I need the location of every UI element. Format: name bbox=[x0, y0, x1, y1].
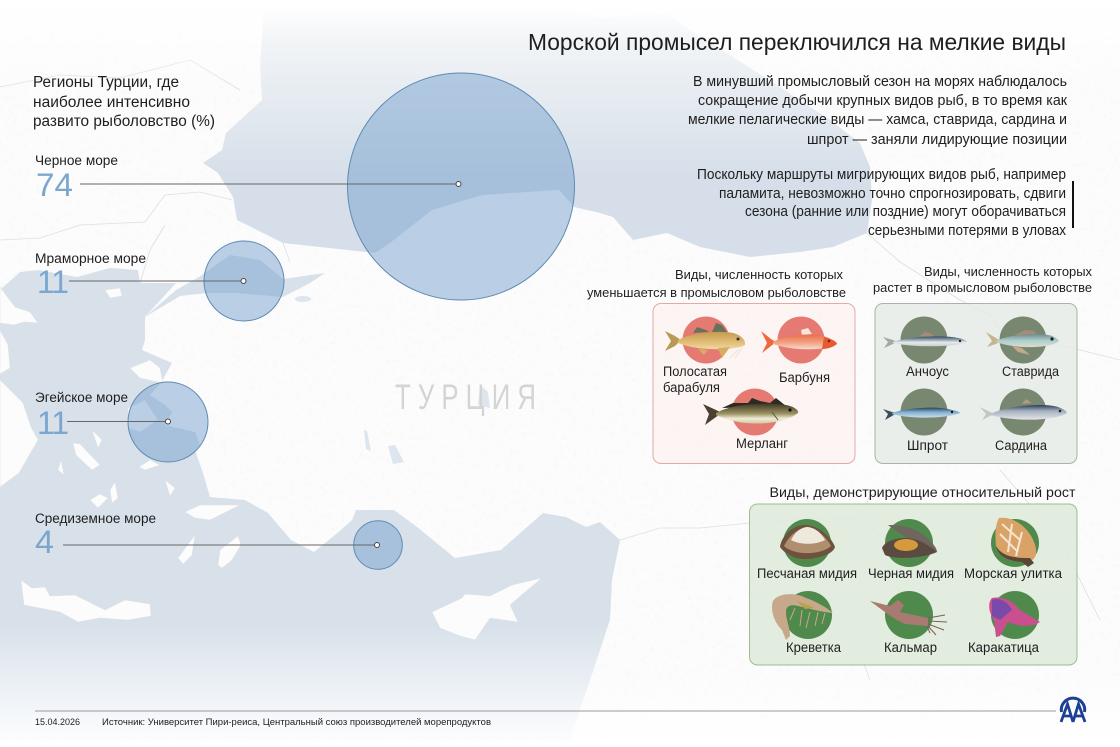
caption: Каракатица bbox=[968, 640, 1039, 655]
label: Mediterranean Sea: Средиземное море bbox=[35, 511, 156, 526]
heading: growing species bbox=[873, 264, 1092, 295]
species: whiting bbox=[703, 388, 798, 451]
caption: Черная мидия bbox=[868, 566, 954, 581]
intro paragraph: мелкие пелагические виды — хамса, ставрида, сардина и bbox=[688, 112, 1067, 128]
heading: declining species: Виды, численность которых bbox=[675, 267, 843, 282]
Black Sea bbox=[203, 0, 872, 257]
caption bbox=[663, 364, 727, 395]
species: horse mackerel bbox=[986, 316, 1059, 379]
heading: growing species: растет в промысловом рыболовстве bbox=[873, 280, 1092, 295]
regions heading bbox=[33, 74, 215, 130]
label: Aegean Sea: Эгейское море bbox=[35, 390, 128, 405]
intro paragraph: сокращение добычи крупных видов рыб, в то время как bbox=[698, 93, 1068, 109]
species: striped red mullet bbox=[663, 316, 745, 395]
icon: Anadolu Agency logo bbox=[1061, 698, 1085, 722]
islands and Greek mainland bbox=[0, 287, 542, 640]
caption: Креветка bbox=[786, 640, 841, 655]
title: Морской промысел переключился на мелкие виды bbox=[528, 29, 1066, 55]
label: Black Sea: Черное море bbox=[35, 153, 118, 168]
species: sprat bbox=[883, 388, 960, 453]
caption: Сардина bbox=[995, 438, 1047, 453]
label: Black Sea: 74 bbox=[36, 167, 73, 203]
species: anchovy bbox=[883, 316, 967, 379]
second paragraph: сезона (ранние или поздние) могут оборачиваться bbox=[745, 204, 1066, 220]
panel: relative growth species bbox=[750, 504, 1077, 665]
panel: growing species bbox=[875, 304, 1077, 464]
intro paragraph: шпрот — заняли лидирующие позиции bbox=[807, 132, 1067, 148]
heading: declining species bbox=[587, 267, 846, 300]
Sea of Marmara bbox=[145, 255, 325, 317]
label: Aegean Sea: 1 1 bbox=[37, 405, 69, 441]
species: sand clam bbox=[757, 519, 857, 581]
label: Mediterranean Sea bbox=[35, 511, 156, 560]
second paragraph: паламита, невозможно точно спрогнозировать, сдвиги bbox=[719, 186, 1066, 202]
species: black mussel bbox=[868, 519, 954, 581]
label: Aegean Sea bbox=[35, 390, 128, 441]
species: sea snail bbox=[964, 518, 1062, 581]
Aegean and Mediterranean Sea bbox=[0, 268, 620, 740]
species: sardine bbox=[980, 388, 1067, 453]
label: Marmara Sea: Мраморное море bbox=[35, 251, 146, 266]
second paragraph bbox=[697, 167, 1067, 239]
footer: Источник: Университет Пири-реиса, Центральный союз производителей морепродуктов bbox=[102, 717, 491, 727]
bubble: Aegean Sea 11 bbox=[67, 382, 208, 462]
caption: Мерланг bbox=[736, 436, 788, 451]
caption: Барбуня bbox=[779, 370, 830, 385]
heading: relative growth species: Виды, демонстрирующие относительный рост bbox=[770, 485, 1076, 500]
regions heading: Регионы Турции, где bbox=[33, 74, 179, 91]
intro paragraph: В минувший промысловый сезон на морях наблюдалось bbox=[693, 74, 1067, 90]
regions heading: наиболее интенсивно bbox=[33, 94, 190, 111]
footer bbox=[35, 711, 1056, 727]
lakes bbox=[295, 296, 1040, 464]
regions heading: развито рыболовство (%) bbox=[33, 113, 215, 130]
bubble: Mediterranean Sea 4 bbox=[63, 521, 402, 569]
caption: Шпрот bbox=[907, 438, 948, 453]
caption: Песчаная мидия bbox=[757, 566, 857, 581]
label: Marmara Sea: 1 1 bbox=[37, 264, 69, 300]
label: Black Sea bbox=[35, 153, 118, 203]
footer: 15.04.2026 bbox=[35, 717, 80, 727]
map label: Turkey: Т У Р Ц И Я bbox=[395, 378, 536, 417]
caption: барабуля bbox=[663, 380, 720, 395]
caption: Анчоус bbox=[906, 364, 949, 379]
caption: Морская улитка bbox=[964, 566, 1062, 581]
bubble: Black Sea 74 bbox=[80, 73, 574, 300]
heading: declining species: уменьшается в промысловом рыболовстве bbox=[587, 285, 846, 300]
caption: Кальмар bbox=[884, 640, 937, 655]
species: red mullet bbox=[761, 316, 837, 385]
second paragraph: серьезными потерями в уловах bbox=[868, 223, 1067, 239]
caption: Ставрида bbox=[1002, 364, 1059, 379]
intro paragraph bbox=[688, 74, 1068, 148]
panel: declining species bbox=[653, 304, 855, 464]
second paragraph: Поскольку маршруты мигрирующих видов рыб, например bbox=[697, 167, 1066, 183]
caption: Полосатая bbox=[663, 364, 727, 379]
bubble: Marmara Sea 11 bbox=[69, 241, 284, 321]
heading: growing species: Виды, численность которых bbox=[924, 264, 1092, 279]
accent bar bbox=[1072, 181, 1074, 228]
species: cuttlefish bbox=[968, 591, 1040, 655]
species: shrimp bbox=[772, 591, 841, 655]
label: Marmara Sea bbox=[35, 251, 146, 300]
label: Mediterranean Sea: 4 bbox=[35, 524, 54, 560]
species: squid bbox=[870, 591, 947, 655]
